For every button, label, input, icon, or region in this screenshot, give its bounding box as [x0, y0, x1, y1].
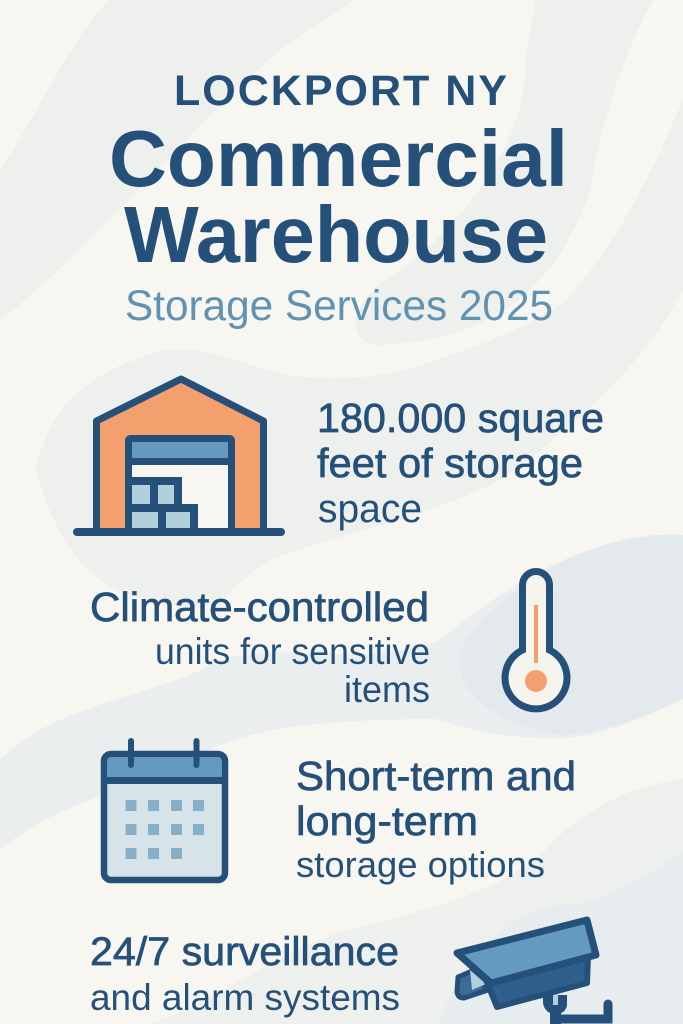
text: surveillance: 24/7 surveillance [90, 930, 399, 974]
text: climate-controlled: units for sensitive [155, 631, 430, 672]
text: storage space: space [318, 487, 422, 531]
icon: security camera [457, 920, 608, 1024]
main title: Warehouse [124, 190, 548, 279]
text: climate-controlled [90, 584, 430, 710]
eyebrow heading: LOCKPORT NY [174, 67, 507, 115]
main title [109, 114, 568, 279]
icon: thermometer [505, 572, 567, 709]
text: term options: Short-term and [296, 753, 576, 799]
text: storage space: feet of storage [317, 440, 583, 486]
icon: warehouse [73, 379, 285, 536]
text: climate-controlled: Climate-controlled [90, 584, 429, 630]
main title: Commercial [109, 114, 568, 203]
subtitle: Storage Services 2025 [125, 282, 553, 330]
text: surveillance: and alarm systems [90, 977, 400, 1018]
text: term options: storage options [296, 844, 545, 885]
icon: calendar [104, 741, 225, 880]
text: term options: long-term [296, 798, 478, 844]
text: term options [296, 753, 576, 885]
text: storage space [317, 395, 604, 531]
text: surveillance [90, 930, 400, 1018]
text: storage space: 180.000 square [317, 395, 604, 441]
text: climate-controlled: items [344, 669, 430, 710]
